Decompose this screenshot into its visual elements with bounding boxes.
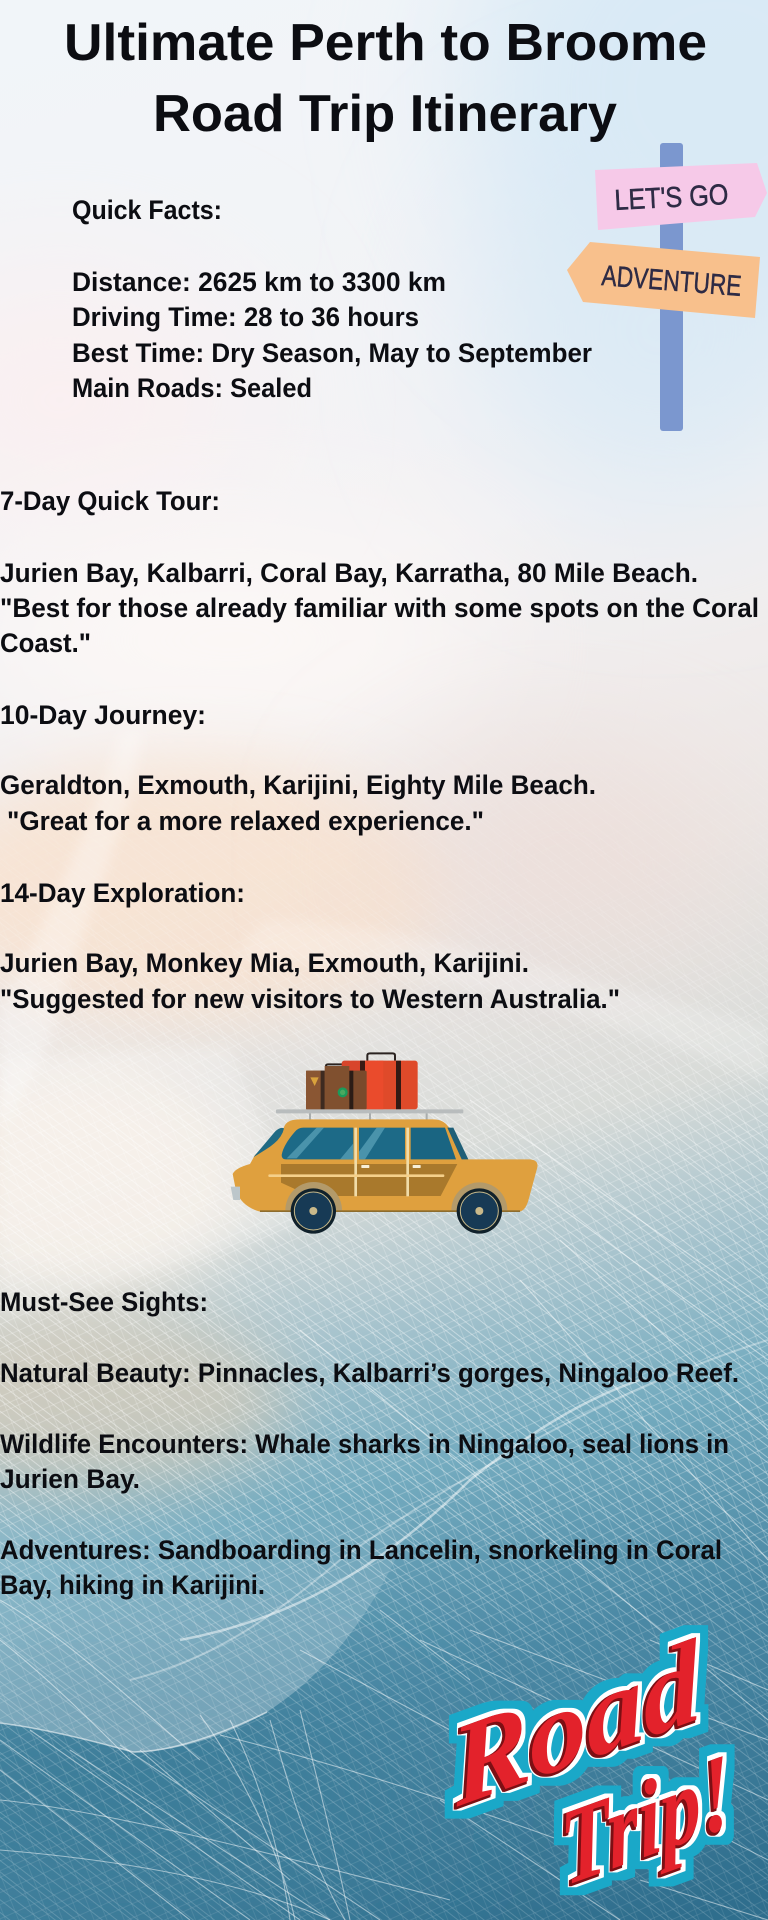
section: must-see sights: Natural Beauty: Pinnacles, Kalbarri’s gorges, Ningaloo Reef. xyxy=(0,1358,739,1388)
section: must-see sights: Bay, hiking in Karijini. xyxy=(0,1570,265,1600)
section: 14-day exploration: "Suggested for new visitors to Western Australia." xyxy=(0,984,620,1014)
wheels xyxy=(291,1188,502,1234)
title: Ultimate Perth to Broome xyxy=(64,14,707,72)
section: 14-day exploration: 14-Day Exploration: xyxy=(0,878,245,908)
logo: road trip: Road xyxy=(445,1614,708,1832)
sign: adventure xyxy=(567,242,760,318)
car body xyxy=(233,1119,538,1212)
section: 10-day journey xyxy=(0,700,596,836)
luggage xyxy=(306,1053,418,1109)
section: must-see sights: Wildlife Encounters: Whale sharks in Ningaloo, seal lions in xyxy=(0,1429,729,1459)
section: must-see sights: Adventures: Sandboarding in Lancelin, snorkeling in Coral xyxy=(0,1535,722,1565)
section: 7-day quick tour: 7-Day Quick Tour: xyxy=(0,486,220,516)
title: Road Trip Itinerary xyxy=(153,85,617,143)
section: 7-day quick tour: Jurien Bay, Kalbarri, Coral Bay, Karratha, 80 Mile Beach. xyxy=(0,558,698,588)
icon: signpost xyxy=(567,143,767,431)
quick facts text: Distance: 2625 km to 3300 km xyxy=(72,267,446,297)
quick facts text: Best Time: Dry Season, May to September xyxy=(72,338,592,368)
section: 14-day exploration: Jurien Bay, Monkey Mia, Exmouth, Karijini. xyxy=(0,948,529,978)
section: must-see sights: Must-See Sights: xyxy=(0,1287,208,1317)
logo: road trip xyxy=(445,1614,737,1909)
section: 7-day quick tour: Coast." xyxy=(0,628,91,658)
title xyxy=(64,14,707,143)
section: 7-day quick tour: "Best for those already familiar with some spots on the Coral xyxy=(0,593,759,623)
quick facts text xyxy=(72,195,592,403)
section: 7-day quick tour xyxy=(0,486,759,658)
section: must-see sights xyxy=(0,1287,739,1600)
section: must-see sights: Jurien Bay. xyxy=(0,1464,140,1494)
quick facts text: Main Roads: Sealed xyxy=(72,373,312,403)
icon: station wagon with luggage xyxy=(231,1053,538,1234)
quick facts text: Quick Facts: xyxy=(72,195,222,225)
section: 10-day journey: 10-Day Journey: xyxy=(0,700,206,730)
section: 10-day journey: Geraldton, Exmouth, Karijini, Eighty Mile Beach. xyxy=(0,770,596,800)
section: 14-day exploration xyxy=(0,878,620,1014)
sign: let's go xyxy=(595,163,767,230)
section: 10-day journey: "Great for a more relaxed experience." xyxy=(7,806,484,836)
sign: let's go: LET'S GO xyxy=(614,179,729,217)
quick facts text: Driving Time: 28 to 36 hours xyxy=(72,302,419,332)
